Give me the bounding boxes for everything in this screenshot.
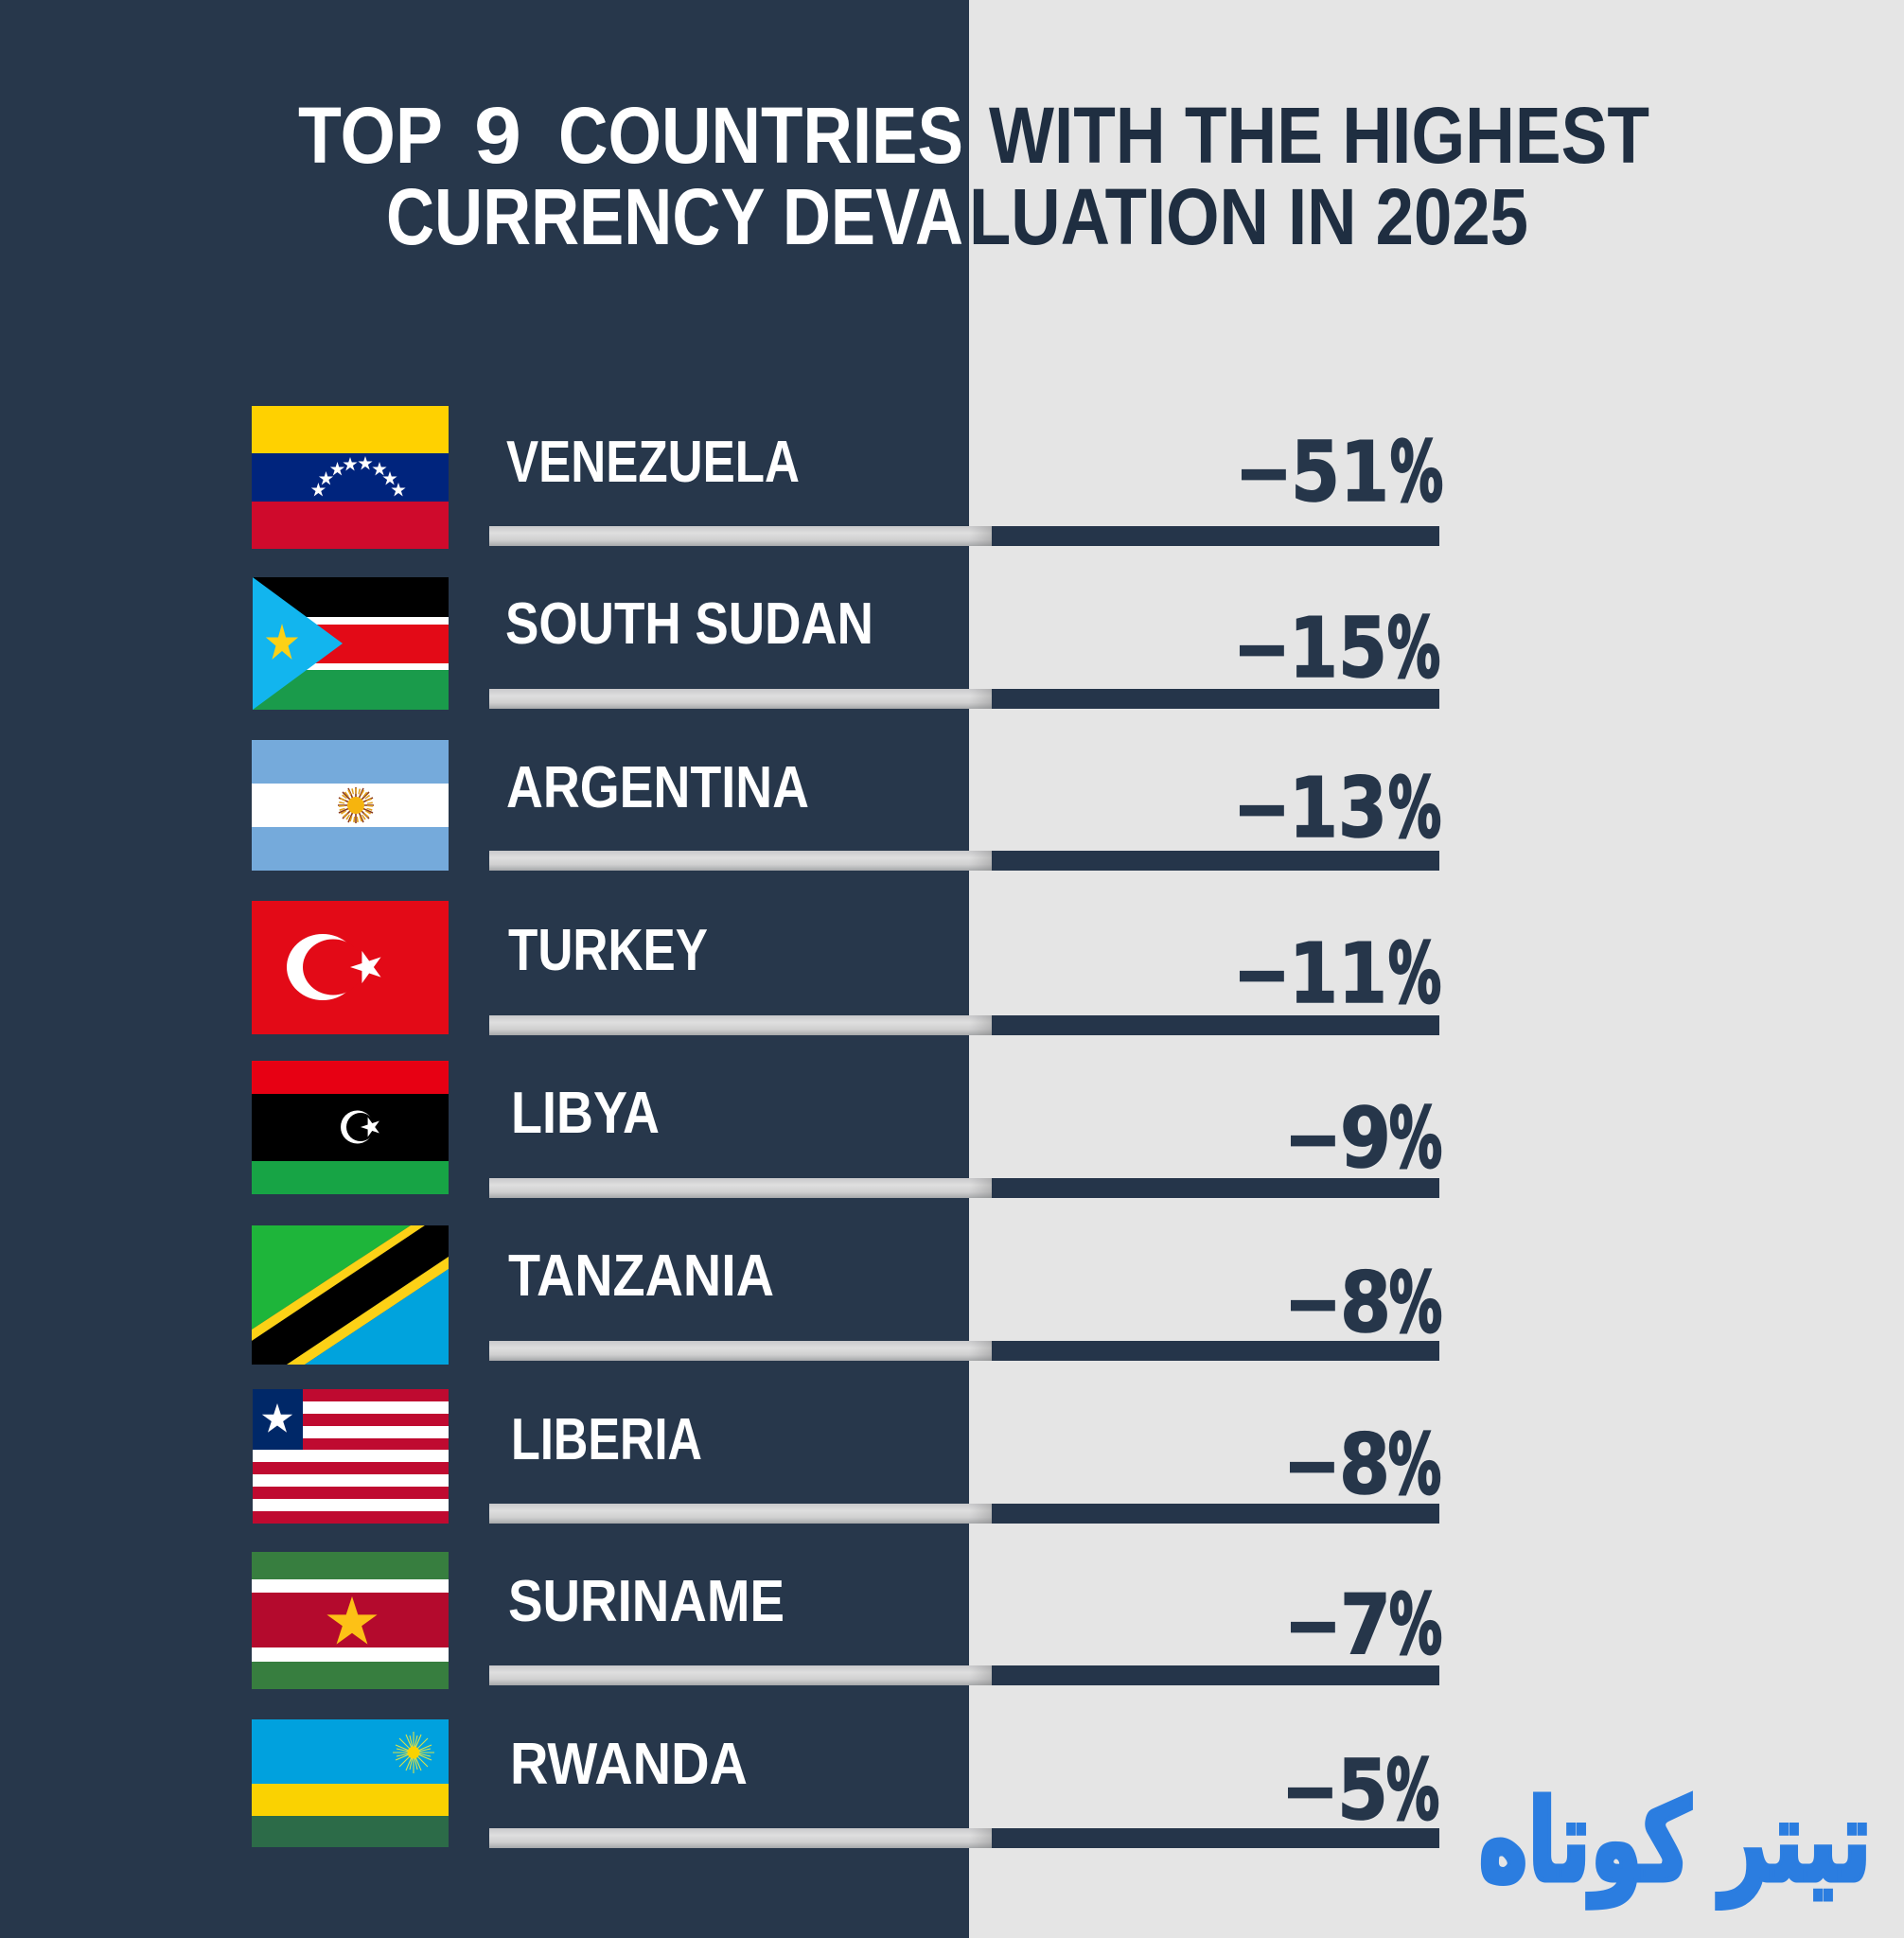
bar [489,1015,1439,1035]
flag: Argentina [252,740,449,871]
country name: TANZANIA [508,1243,774,1309]
row: Suriname [252,1552,1442,1689]
value: − [1281,1742,1339,1839]
value: − [1283,1417,1341,1513]
title: TOP [298,91,443,180]
title: LUATION IN 2025 [969,172,1528,261]
row: Turkey [252,901,1441,1035]
flag: Libya [252,1061,449,1194]
flag: Turkey [252,901,449,1034]
title: 9 [474,91,521,180]
flag: Rwanda [252,1719,449,1847]
row: South Sudan [253,577,1440,710]
country name: ARGENTINA [506,755,809,820]
value: 15 [1289,600,1387,696]
country name: RWANDA [510,1732,748,1797]
bar [489,689,1439,709]
country name: LIBYA [511,1081,660,1146]
value: 8 [1339,1417,1390,1513]
country name: LIBERIA [511,1407,702,1472]
row: Argentina [252,740,1441,871]
value: 9 [1340,1090,1391,1187]
value: − [1284,1090,1342,1187]
country name: VENEZUELA [506,430,800,495]
value: % [1388,760,1441,856]
value: % [1390,424,1443,520]
value: % [1387,600,1440,696]
value: 13 [1289,760,1387,856]
row: Venezuela [252,406,1443,549]
row: Tanzania [252,1225,1442,1365]
flag: Liberia [253,1389,449,1524]
flag: Tanzania [252,1225,449,1365]
value: 51 [1291,424,1389,520]
value: − [1284,1255,1342,1351]
flag: South Sudan [253,577,449,710]
bar [489,851,1439,871]
value: % [1388,925,1441,1022]
row: Libya [252,1061,1442,1198]
country name: SURINAME [508,1569,785,1634]
value: 7 [1340,1577,1391,1673]
bar [489,1665,1439,1685]
row: Rwanda [252,1719,1439,1848]
title: WITH THE HIGHEST [989,91,1649,180]
row: Liberia [253,1389,1441,1524]
value: % [1386,1742,1439,1839]
value: % [1389,1255,1442,1351]
value: 8 [1340,1255,1391,1351]
value: % [1389,1090,1442,1187]
value: 5 [1337,1742,1388,1839]
title [298,91,1649,261]
bar [489,1341,1439,1361]
value: − [1233,925,1291,1022]
bar [489,1828,1439,1848]
bar [489,1178,1439,1198]
country name: SOUTH SUDAN [505,591,873,657]
value: 11 [1289,925,1387,1022]
value: % [1389,1577,1442,1673]
value: − [1284,1577,1342,1673]
country name: TURKEY [508,918,708,983]
flag: Suriname [252,1552,449,1689]
bar [489,1504,1439,1524]
panel: dark left background [0,0,969,1938]
flag: Venezuela [252,406,449,549]
title: COUNTRIES [558,91,963,180]
value: − [1233,600,1291,696]
title: CURRENCY DEVA [386,172,963,261]
value: − [1233,760,1291,856]
value: % [1388,1417,1441,1513]
bar [489,526,1439,546]
value: − [1235,424,1293,520]
